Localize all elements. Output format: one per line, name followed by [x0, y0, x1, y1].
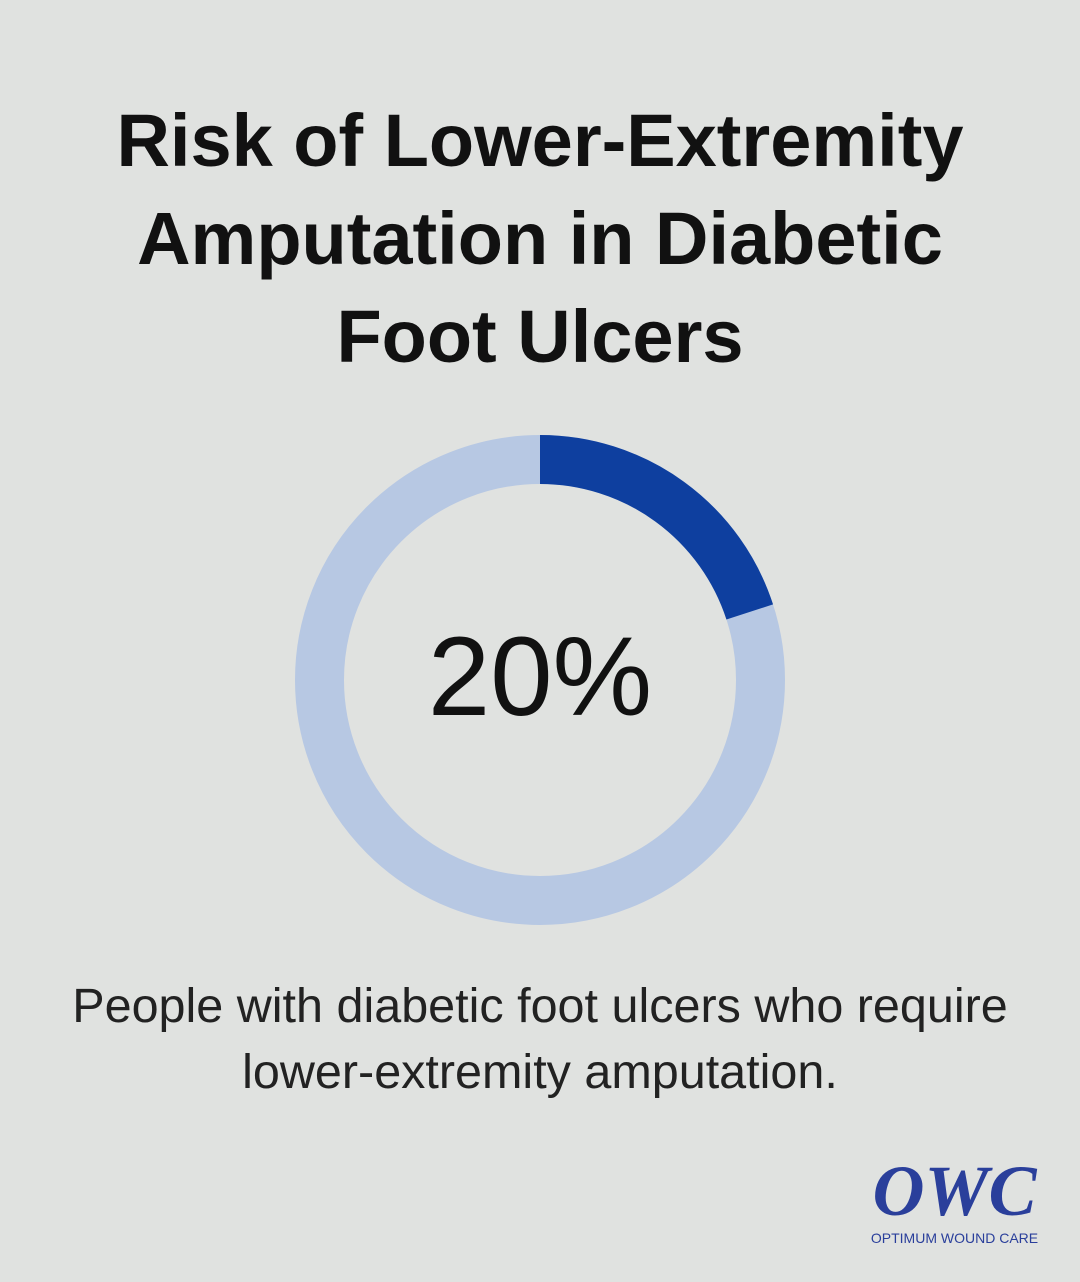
title: [116, 99, 964, 378]
caption: [72, 979, 1008, 1099]
donut chart: 20%: [428, 614, 652, 739]
title: Risk of Lower-Extremity: [116, 99, 964, 182]
title: Amputation in Diabetic: [137, 197, 943, 280]
title: Foot Ulcers: [336, 295, 744, 378]
caption: lower-extremity amputation.: [242, 1045, 838, 1099]
logo: OPTIMUM WOUND CARE: [871, 1230, 1038, 1246]
caption: People with diabetic foot ulcers who require: [72, 979, 1008, 1033]
logo: OWC: [872, 1151, 1037, 1231]
